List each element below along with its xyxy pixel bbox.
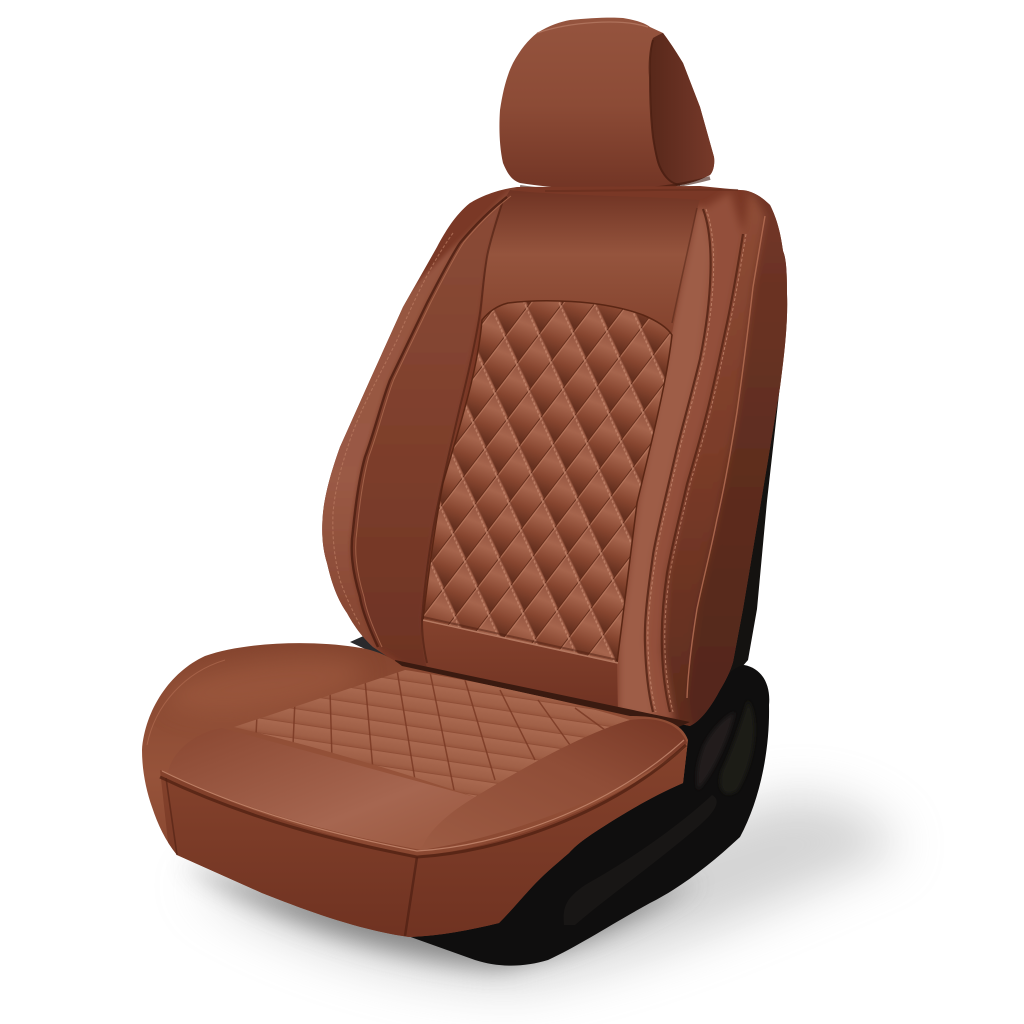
headrest outline <box>499 18 714 193</box>
illustration: tan leather car seat <box>142 18 902 1004</box>
backrest right bolster bands <box>617 190 788 726</box>
cushion seams <box>147 660 686 936</box>
backrest left outer band <box>322 188 513 654</box>
shadow strip between backrest and cushion <box>395 660 690 735</box>
headrest side panel <box>650 33 714 185</box>
quilted backrest panel <box>423 301 672 663</box>
quilted seat panel <box>234 670 630 797</box>
headrest seams <box>650 40 680 185</box>
backrest left inner bolster <box>354 207 500 666</box>
right cushion bolster <box>421 719 687 850</box>
lower right cushion trim <box>522 790 680 908</box>
seat cushion <box>142 643 690 945</box>
cushion front panel <box>160 770 417 940</box>
cushion right front panel <box>405 745 690 945</box>
seat quilt grooves <box>256 670 605 795</box>
lower backrest band <box>422 620 618 715</box>
backrest upper centre panel <box>481 190 700 333</box>
backrest <box>322 186 788 726</box>
backrest silhouette <box>322 186 787 726</box>
black rear shell and base <box>350 385 780 966</box>
floor shadow <box>180 797 900 985</box>
headrest <box>499 18 714 193</box>
backrest seams <box>333 190 765 712</box>
cushion top panel <box>209 751 474 850</box>
cushion body <box>142 643 688 937</box>
left cushion bolster highlight <box>181 657 352 708</box>
